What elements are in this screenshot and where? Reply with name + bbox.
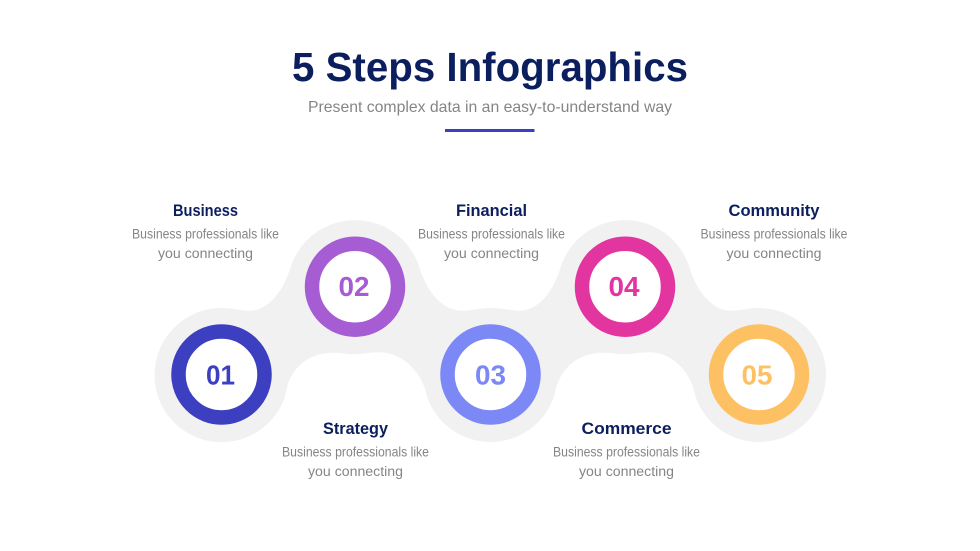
text block: Business bbox=[132, 201, 279, 261]
description: Business professionals like bbox=[700, 226, 848, 242]
description: Business professionals like bbox=[418, 226, 565, 242]
ring 01 bbox=[178, 332, 264, 418]
description: you connecting bbox=[158, 246, 253, 261]
description bbox=[418, 226, 565, 261]
description: you connecting bbox=[308, 464, 403, 479]
heading: Community bbox=[728, 201, 820, 220]
description: you connecting bbox=[726, 246, 822, 261]
title underline bbox=[445, 129, 534, 132]
number 01: 01 bbox=[206, 360, 235, 390]
ring 05 bbox=[716, 332, 802, 418]
ring 03 bbox=[448, 332, 534, 418]
heading: Financial bbox=[456, 201, 527, 220]
description: Business professionals like bbox=[132, 226, 279, 242]
description bbox=[132, 226, 279, 261]
ring 02 bbox=[312, 244, 398, 330]
description: Business professionals like bbox=[282, 444, 429, 460]
ring 04 bbox=[582, 244, 668, 330]
step 02 bbox=[312, 244, 398, 330]
description: you connecting bbox=[444, 246, 539, 261]
description bbox=[282, 444, 429, 479]
step 03 bbox=[448, 332, 534, 418]
number 03: 03 bbox=[475, 360, 506, 390]
number 04: 04 bbox=[608, 271, 640, 302]
number 02: 02 bbox=[338, 271, 370, 302]
subtitle: Present complex data in an easy-to-understand way bbox=[308, 99, 672, 116]
description: you connecting bbox=[579, 464, 674, 479]
text block: Financial bbox=[418, 201, 565, 261]
step 05 bbox=[716, 332, 802, 418]
number 05: 05 bbox=[742, 360, 772, 390]
description: Business professionals like bbox=[553, 444, 700, 460]
heading: Commerce bbox=[582, 419, 672, 438]
grey wave background bbox=[154, 220, 826, 442]
heading: Business bbox=[173, 201, 238, 220]
description bbox=[553, 444, 700, 479]
text block: Strategy bbox=[282, 419, 429, 479]
step 01 bbox=[178, 332, 264, 418]
text block: Community bbox=[700, 201, 848, 261]
text block: Commerce bbox=[553, 419, 700, 479]
heading: Strategy bbox=[323, 419, 389, 438]
title: 5 Steps Infographics bbox=[292, 44, 688, 90]
description bbox=[700, 226, 848, 261]
step 04 bbox=[582, 244, 668, 330]
